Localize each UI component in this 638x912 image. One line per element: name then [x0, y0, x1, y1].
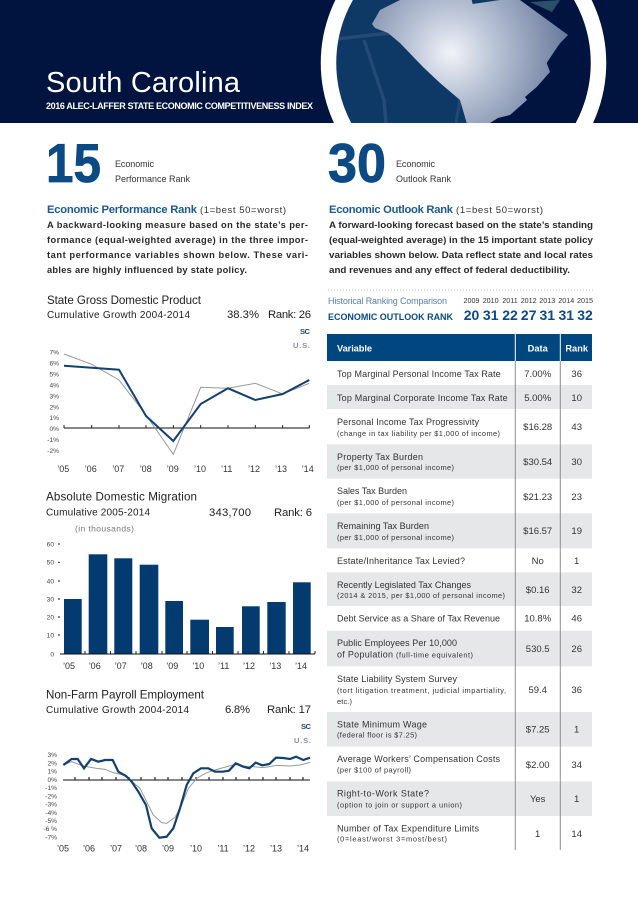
performance description: A backward-looking measure based on the state’s per- [47, 220, 308, 230]
row: state minimum wage: (federal floor is $7.25) [337, 731, 417, 740]
outlook description: A forward-looking forecast based on the state’s standing [329, 220, 593, 230]
table header [327, 334, 592, 361]
chart heading: state gross domestic product [47, 294, 311, 321]
row: property tax burden: Property Tax Burden [337, 452, 423, 462]
row: public employees: of Population [337, 650, 393, 660]
row: public employees: 530.5 [526, 644, 550, 655]
row: state minimum wage [337, 720, 579, 740]
row: corporate income tax rate: Top Marginal Corporate Income Tax Rate [337, 393, 508, 403]
line chart: non-farm payroll employment: ’10 [190, 844, 202, 854]
row: right-to-work: Yes [530, 794, 546, 805]
performance rank label: Performance Rank [115, 174, 190, 184]
row: tax progressivity [337, 417, 582, 438]
bar chart: domestic migration: ’11 [218, 661, 229, 671]
line chart: non-farm payroll employment: 3% [47, 752, 57, 759]
row: sales tax burden: Sales Tax Burden [337, 486, 407, 496]
row: recently legislated tax changes: Recently Legislated Tax Changes [337, 580, 472, 590]
row: right-to-work [337, 789, 579, 810]
row: remaining tax burden: Remaining Tax Burden [337, 521, 429, 531]
historical ranking comparison: 20 [464, 307, 479, 323]
row: debt service: 46 [571, 614, 582, 625]
row: personal income tax rate [337, 369, 582, 380]
row: personal income tax rate: 36 [571, 369, 582, 380]
outlook rank label: Economic [396, 159, 436, 169]
outlook description: and revenues and any effect of federal deductibility. [329, 265, 570, 275]
line chart: gross domestic product: ’08 [140, 464, 152, 474]
line chart: non-farm payroll employment: ’07 [110, 844, 122, 854]
row: sales tax burden: (per $1,000 of personal income) [337, 498, 454, 507]
subtitle: 2016 ALEC-LAFFER STATE ECONOMIC COMPETITIVENESS INDEX [46, 101, 313, 111]
line chart: gross domestic product: 2% [49, 404, 59, 412]
outlook rank number: 30 [328, 132, 386, 194]
chart heading: state gross domestic product: Rank: 26 [268, 309, 311, 321]
row: tax progressivity: $16.28 [523, 422, 552, 433]
line chart: non-farm payroll employment: 2% [47, 760, 57, 767]
historical ranking comparison [328, 296, 593, 323]
row: workers compensation: Average Workers’ Compensation Costs [337, 754, 500, 764]
bar chart: domestic migration: 10 [47, 632, 54, 640]
row: tax expenditure limits: 14 [571, 829, 582, 840]
row: workers compensation [337, 754, 582, 775]
performance rank number: 15 [46, 132, 101, 194]
chart heading: state gross domestic product: 38.3% [227, 309, 259, 321]
chart heading: absolute domestic migration: Absolute Domestic Migration [46, 490, 197, 504]
bar chart: domestic migration: ’05 [63, 661, 75, 671]
performance heading: (1=best 50=worst) [200, 205, 286, 216]
line chart: gross domestic product: ’12 [248, 464, 260, 474]
line chart: non-farm payroll employment: -2% [45, 793, 57, 800]
bar chart: domestic migration: ’07 [115, 661, 127, 671]
chart heading: absolute domestic migration [46, 490, 312, 534]
outlook heading: Economic Outlook Rank [329, 204, 454, 216]
row: public employees: Public Employees Per 10,000 [337, 638, 457, 648]
legend: U.S. [293, 341, 310, 350]
bar chart: domestic migration: 40 [47, 578, 54, 586]
bar chart: domestic migration: 0 [50, 652, 54, 658]
row: property tax burden: $30.54 [523, 457, 552, 468]
performance rank label [115, 159, 190, 184]
line chart: gross domestic product: 0% [49, 426, 59, 433]
chart heading: absolute domestic migration: Cumulative 2005-2014 [46, 508, 150, 518]
line chart: gross domestic product: -1% [47, 437, 59, 444]
line chart: non-farm payroll employment: ’13 [270, 844, 282, 854]
row: sales tax burden: $21.23 [523, 492, 552, 503]
table header: Rank [565, 344, 589, 354]
outlook description: (equal-weighted average) in the 15 important state policy [329, 235, 594, 245]
row: sales tax burden [337, 486, 582, 507]
row: estate tax [337, 556, 579, 567]
line chart: non-farm payroll employment: -5% [45, 818, 57, 825]
line chart: non-farm payroll employment: ’09 [162, 844, 174, 854]
line chart: gross domestic product [47, 327, 314, 474]
historical ranking comparison: 31 [559, 307, 574, 323]
outlook heading: (1=best 50=worst) [456, 205, 543, 216]
bar chart: domestic migration: 20 [47, 614, 54, 622]
bar chart: domestic migration: 60 [47, 542, 54, 548]
row: state liability system survey [337, 674, 582, 706]
historical ranking comparison: Historical Ranking Comparison [328, 296, 447, 306]
row: recently legislated tax changes: (2014 & 2015, per $1,000 of personal income) [337, 591, 505, 600]
performance description [47, 220, 308, 275]
row: tax expenditure limits: Number of Tax Expenditure Limits [337, 824, 480, 834]
line chart: gross domestic product: ’07 [112, 464, 124, 474]
row: property tax burden: (per $1,000 of personal income) [337, 463, 454, 472]
bar chart: domestic migration: ’08 [141, 661, 153, 671]
legend: U.S. [294, 736, 311, 745]
row: workers compensation: (per $100 of payroll) [337, 766, 411, 775]
outlook description [329, 220, 594, 275]
historical ranking comparison: 2011 [502, 296, 518, 305]
performance description: formance (equal-weighted average) in the three impor- [47, 235, 308, 245]
row: state liability system survey: (tort litigation treatment, judicial impartiality, [337, 686, 506, 695]
row: corporate income tax rate: 10 [571, 393, 582, 404]
chart heading: state gross domestic product: State Gross Domestic Product [47, 294, 202, 307]
line chart: non-farm payroll employment [43, 722, 312, 854]
line chart: non-farm payroll employment: -7% [45, 834, 57, 841]
historical ranking comparison: 2010 [483, 296, 499, 305]
row: debt service: Debt Service as a Share of Tax Revenue [337, 614, 500, 624]
chart heading: non-farm payroll employment: Rank: 17 [267, 704, 311, 716]
row: estate tax: Estate/Inheritance Tax Levied? [337, 556, 465, 566]
line chart: gross domestic product: 3% [49, 394, 59, 400]
outlook rank label: Outlook Rank [396, 174, 452, 184]
row: public employees: (full-time equivalent) [396, 651, 473, 660]
line chart: gross domestic product: 5% [49, 372, 59, 378]
row: tax progressivity: Personal Income Tax Progressivity [337, 417, 480, 427]
row: tax expenditure limits: 1 [535, 829, 540, 840]
historical ranking comparison: 32 [577, 307, 593, 323]
row: state minimum wage: 1 [574, 725, 579, 736]
line chart: non-farm payroll employment: ’05 [57, 844, 69, 854]
bar chart: domestic migration: ’14 [295, 661, 307, 671]
performance heading: Economic Performance Rank [47, 204, 198, 216]
row: state liability system survey: State Liability System Survey [337, 674, 458, 684]
historical ranking comparison: 22 [502, 307, 518, 323]
outlook description: variables shown below. Data reflect state and local rates [329, 250, 593, 260]
line chart: gross domestic product: 1% [49, 415, 59, 422]
line chart: non-farm payroll employment: ’12 [243, 844, 255, 854]
historical ranking comparison: 2009 [464, 296, 480, 305]
chart heading: absolute domestic migration: (in thousands) [75, 524, 134, 534]
historical ranking comparison: 27 [521, 307, 537, 323]
performance heading [47, 204, 286, 216]
performance rank label: Economic [115, 159, 154, 169]
line chart: non-farm payroll employment: ’06 [83, 844, 95, 854]
row: tax expenditure limits [337, 824, 582, 844]
chart heading: state gross domestic product: Cumulative Growth 2004-2014 [47, 310, 190, 321]
line chart: non-farm payroll employment: -1% [45, 785, 57, 792]
row: estate tax: No [532, 556, 544, 567]
row: tax progressivity: (change in tax liability per $1,000 of income) [337, 429, 500, 438]
line chart: non-farm payroll employment: -4% [45, 810, 57, 817]
row: state minimum wage: State Minimum Wage [337, 720, 427, 730]
outlook heading [329, 204, 543, 216]
historical ranking comparison: ECONOMIC OUTLOOK RANK [328, 312, 453, 323]
line chart: non-farm payroll employment: 1% [47, 769, 57, 776]
chart heading: non-farm payroll employment: Cumulative Growth 2004-2014 [46, 705, 189, 716]
row: recently legislated tax changes: $0.16 [526, 585, 550, 596]
line chart: gross domestic product: ’06 [85, 464, 97, 474]
line chart: non-farm payroll employment: -3% [45, 802, 57, 809]
row: corporate income tax rate: 5.00% [524, 393, 552, 404]
line chart: gross domestic product: ’14 [302, 464, 314, 474]
row: public employees [337, 638, 582, 660]
table header: Variable [337, 344, 372, 354]
row: state minimum wage: $7.25 [526, 725, 550, 736]
line chart: non-farm payroll employment: ’14 [297, 844, 309, 854]
historical ranking comparison: 2014 [558, 296, 574, 305]
row: workers compensation: $2.00 [526, 760, 550, 771]
row: debt service: 10.8% [524, 614, 552, 625]
row: debt service [337, 614, 582, 625]
line chart: non-farm payroll employment: 0% [47, 777, 57, 784]
legend [293, 327, 311, 350]
row: right-to-work: 1 [574, 794, 579, 805]
icon: South Carolina state shape [372, 0, 568, 123]
line chart: gross domestic product: ’09 [167, 464, 179, 474]
table header: Data [528, 344, 549, 354]
line chart: gross domestic product: 7% [49, 350, 59, 356]
line chart: gross domestic product: ’10 [194, 464, 206, 474]
map medallion [320, 0, 606, 123]
row: estate tax: 1 [574, 556, 579, 567]
outlook rank label [396, 159, 452, 184]
chart heading: non-farm payroll employment [46, 688, 311, 716]
historical ranking comparison: 31 [540, 307, 555, 323]
performance description: tant performance variables shown below. These vari- [47, 250, 308, 260]
header banner [0, 0, 638, 123]
bar chart: domestic migration: ’13 [269, 661, 281, 671]
historical ranking comparison: 2015 [577, 296, 593, 305]
legend [294, 722, 312, 745]
bar chart: domestic migration: ’09 [166, 661, 178, 671]
bar chart: domestic migration: ’12 [243, 661, 255, 671]
row: workers compensation: 34 [571, 760, 582, 771]
line chart: gross domestic product: ’13 [275, 464, 287, 474]
bar chart: domestic migration: ’06 [89, 661, 101, 671]
row: property tax burden [337, 452, 582, 472]
bar chart: domestic migration: ’10 [192, 661, 204, 671]
bar chart: domestic migration: 50 [47, 560, 54, 566]
chart heading: absolute domestic migration: Rank: 6 [274, 507, 312, 519]
historical ranking comparison: 2013 [539, 296, 555, 305]
variables table [327, 334, 592, 850]
row: right-to-work: (option to join or support a union) [337, 801, 462, 810]
line chart: non-farm payroll employment: -6 % [43, 826, 57, 833]
row: state liability system survey: 59.4 [528, 685, 547, 696]
line chart: gross domestic product: ’11 [221, 464, 232, 474]
chart heading: non-farm payroll employment: 6.8% [225, 704, 250, 716]
row: right-to-work: Right-to-Work State? [337, 789, 429, 799]
row: personal income tax rate: 7.00% [524, 369, 552, 380]
legend: SC [301, 722, 312, 731]
row: remaining tax burden: 19 [571, 526, 582, 537]
historical ranking comparison: 31 [483, 307, 499, 323]
chart heading: absolute domestic migration: 343,700 [209, 507, 251, 519]
row: remaining tax burden: $16.57 [523, 526, 552, 537]
line chart: gross domestic product: 6% [49, 360, 59, 368]
historical ranking comparison: 2012 [521, 296, 537, 305]
line chart: gross domestic product: ’05 [57, 464, 69, 474]
row: tax expenditure limits: (0=least/worst 3=most/best) [337, 835, 447, 844]
row: public employees: 26 [571, 644, 582, 655]
row: property tax burden: 30 [571, 457, 582, 468]
title: South Carolina [46, 67, 241, 99]
row: corporate income tax rate [337, 393, 582, 404]
row: personal income tax rate: Top Marginal Personal Income Tax Rate [337, 369, 501, 379]
line chart: non-farm payroll employment: ’11 [217, 844, 229, 854]
row: state liability system survey: etc.) [337, 697, 352, 706]
row: recently legislated tax changes: 32 [571, 585, 582, 596]
bar chart: domestic migration: 30 [47, 596, 54, 604]
line chart: non-farm payroll employment: ’08 [135, 844, 147, 854]
row: remaining tax burden [337, 521, 582, 542]
row: remaining tax burden: (per $1,000 of personal income) [337, 533, 454, 542]
chart heading: non-farm payroll employment: Non-Farm Payroll Employment [46, 688, 205, 702]
performance description: ables are highly influenced by state policy. [47, 265, 247, 275]
row: tax progressivity: 43 [571, 422, 582, 433]
row: sales tax burden: 23 [571, 492, 582, 503]
legend: SC [300, 327, 311, 336]
row: recently legislated tax changes [337, 580, 582, 600]
row: state liability system survey: 36 [571, 685, 582, 696]
bar chart: domestic migration [47, 542, 315, 671]
line chart: gross domestic product: -2% [47, 448, 59, 455]
line chart: gross domestic product: 4% [49, 382, 59, 390]
